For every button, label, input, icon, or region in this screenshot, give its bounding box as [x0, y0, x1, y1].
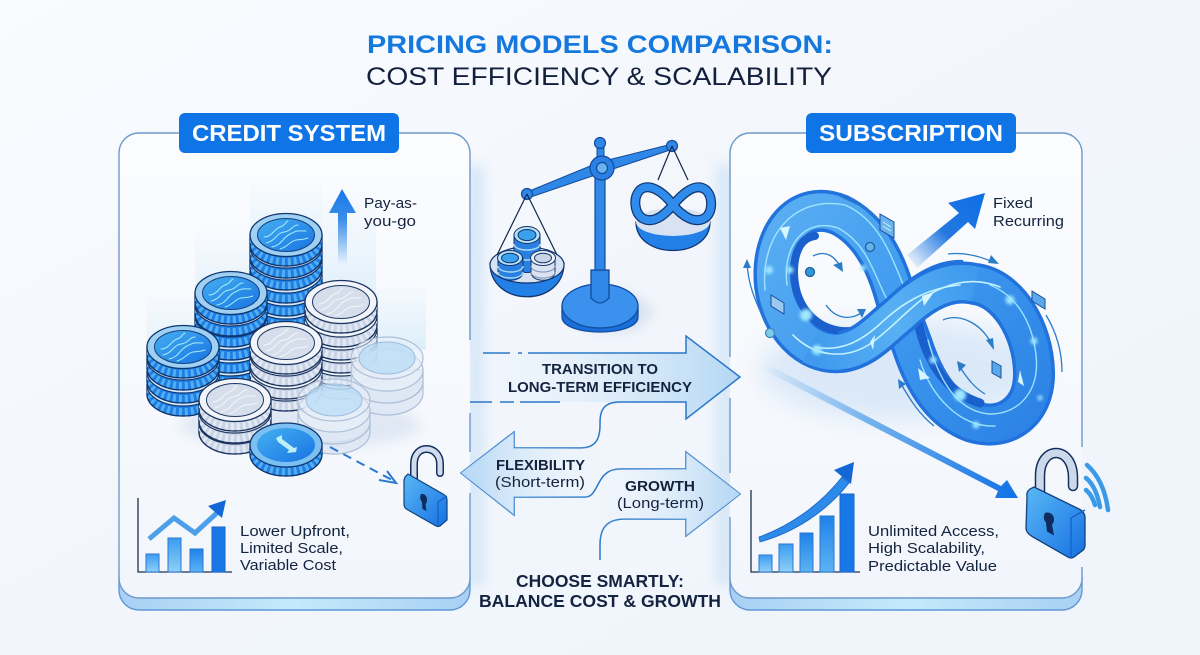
- callout: choose smartly: [479, 571, 721, 611]
- highlight lines on back strand: [765, 203, 1037, 426]
- arrow: fixed recurring: [907, 193, 985, 268]
- title: COST EFFICIENCY & SCALABILITY: [366, 63, 832, 91]
- arrow: flexibility short-term: FLEXIBILITY: [496, 457, 585, 474]
- text: subscription summary: [868, 523, 999, 575]
- label: fixed recurring: [993, 195, 1064, 230]
- arrow: growth long-term: (Long-term): [617, 495, 704, 512]
- floating document: inner: [992, 361, 1001, 378]
- label: fixed recurring: Fixed: [993, 195, 1033, 212]
- front-left blue stack: [147, 326, 219, 416]
- title: [366, 31, 833, 91]
- left pan with coins: [490, 194, 564, 297]
- text: credit system summary: [240, 523, 350, 574]
- arrow: transition to long-term efficiency: [461, 336, 740, 560]
- scale base: [562, 170, 638, 332]
- centre column glow: [466, 165, 734, 585]
- glowing nodes: [765, 265, 1042, 428]
- icon: balance scale: [490, 138, 711, 332]
- icon: credit open lock: [404, 449, 447, 526]
- callout: choose smartly: BALANCE COST & GROWTH: [479, 591, 721, 611]
- front strand: [840, 281, 962, 352]
- icon: infinity loop: [743, 196, 1062, 428]
- middle blue stack: [195, 272, 267, 399]
- middle silver stack: [250, 322, 322, 411]
- icon: coin stacks: [147, 214, 423, 476]
- front strand highlights: [793, 282, 1000, 354]
- label: pay-as-you-go: [364, 195, 417, 230]
- text: credit system summary: Limited Scale,: [240, 540, 343, 557]
- arrow: diagonal to lock: [760, 362, 1018, 498]
- badge: credit system: [179, 113, 399, 153]
- panel: credit system: [119, 133, 470, 610]
- text: credit system summary: Variable Cost: [240, 557, 337, 574]
- front silver stack: [199, 378, 271, 454]
- text: subscription summary: Predictable Value: [868, 558, 997, 575]
- floating document: top: [880, 214, 894, 238]
- arrow: flexibility short-term: (Short-term): [495, 474, 585, 491]
- right pan with infinity: [635, 146, 711, 250]
- single blue coin: [250, 423, 322, 476]
- icon: subscription open lock: [1026, 453, 1108, 558]
- arrow: growth long-term: [597, 452, 740, 545]
- floating nodes and orbit arrows: [747, 196, 1062, 426]
- label: fixed recurring: Recurring: [993, 213, 1064, 230]
- wireless signal: [1086, 465, 1108, 510]
- arrow: flexibility short-term: [461, 430, 600, 515]
- badge: subscription: [806, 113, 1016, 153]
- arrow: growth long-term: GROWTH: [625, 478, 695, 495]
- chart: subscription bars: [751, 462, 860, 572]
- floating document: left: [771, 295, 784, 314]
- arrow: transition to long-term efficiency: TRANSITION TO: [542, 361, 658, 378]
- ribbon arrowheads: [780, 226, 1024, 386]
- dashed arrow to lock: [330, 447, 396, 483]
- text: subscription summary: Unlimited Access,: [868, 523, 999, 540]
- arrow: pay-as-you-go: [329, 189, 356, 265]
- callout: choose smartly: CHOOSE SMARTLY:: [516, 571, 684, 591]
- arrow: transition to long-term efficiency: LONG-TERM EFFICIENCY: [508, 379, 692, 396]
- scale beam: [522, 138, 678, 200]
- translucent right stack: [351, 337, 423, 415]
- floating document: right: [1032, 291, 1045, 309]
- label: pay-as-you-go: Pay-as-: [364, 195, 417, 212]
- badge: credit system: CREDIT SYSTEM: [192, 120, 386, 146]
- label: pay-as-you-go: you-go: [364, 213, 416, 230]
- inner walls: [794, 236, 980, 403]
- chart: credit system bars: [138, 498, 232, 572]
- tall blue stack: [250, 214, 322, 342]
- translucent front stack: [298, 379, 370, 454]
- coin glow columns: [147, 175, 426, 370]
- badge: subscription: SUBSCRIPTION: [819, 120, 1003, 146]
- panel: subscription: [730, 133, 1082, 610]
- text: subscription summary: High Scalability,: [868, 540, 985, 557]
- title: PRICING MODELS COMPARISON:: [367, 31, 833, 59]
- text: credit system summary: Lower Upfront,: [240, 523, 350, 540]
- back silver stack: [305, 280, 377, 399]
